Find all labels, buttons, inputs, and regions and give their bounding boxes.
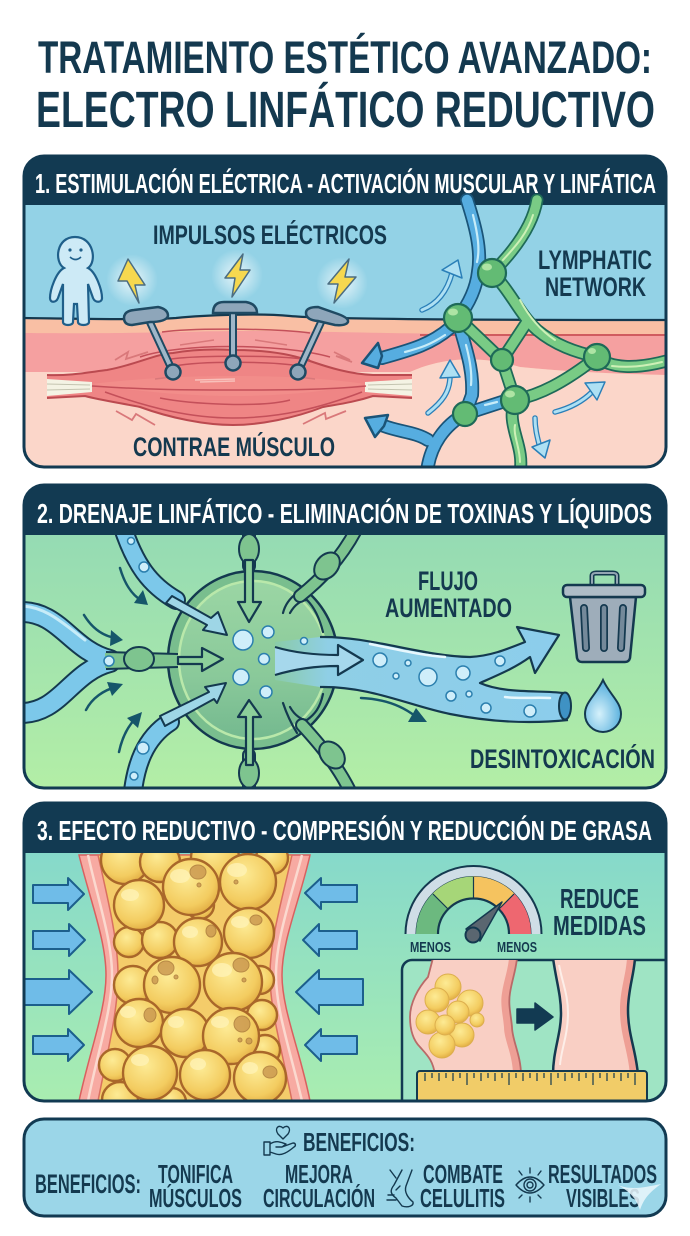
label: contrae músculo: CONTRAE MÚSCULO — [133, 431, 335, 462]
lymph node — [168, 571, 338, 749]
benefit: combate celulitis — [420, 1159, 505, 1213]
gauge: MENOS — [497, 939, 537, 956]
title — [36, 32, 655, 138]
label: flujo aumentado — [385, 566, 512, 623]
incoming vessels — [18, 525, 356, 800]
muscle — [47, 329, 412, 425]
gauge — [410, 872, 537, 956]
benefit: resultados visibles: VISIBLES — [566, 1183, 640, 1213]
label: lymphatic network — [538, 245, 652, 302]
icon: hand with heart — [264, 1126, 295, 1155]
benefit: resultados visibles — [548, 1159, 657, 1213]
compression arrows — [20, 878, 363, 1061]
label: lymphatic network: LYMPHATIC — [538, 245, 652, 275]
benefit: combate celulitis: COMBATE — [423, 1159, 503, 1189]
label: reduce medidas: REDUCE — [560, 883, 639, 914]
inset: before and after with ruler — [400, 958, 664, 1100]
benefit: mejora circulación: MEJORA — [285, 1159, 353, 1189]
benefit: combate celulitis: CELULITIS — [420, 1183, 505, 1213]
benefit: tonifica músculos: MÚSCULOS — [149, 1183, 242, 1213]
tissue column with fat cells — [78, 853, 311, 1100]
label: flujo aumentado: AUMENTADO — [385, 593, 512, 623]
small flow arrows — [422, 260, 605, 458]
label: lymphatic network: NETWORK — [545, 272, 646, 302]
panel: drenaje linfático — [18, 485, 666, 800]
icons: lightning bolts — [106, 249, 368, 309]
lymphatic network — [362, 200, 670, 472]
icon: person — [50, 237, 102, 325]
node particles — [233, 626, 308, 698]
panel: estimulación eléctrica — [24, 156, 670, 472]
watermark sparkle — [618, 1184, 661, 1210]
icon: water drop — [585, 680, 621, 732]
label: flujo aumentado: FLUJO — [418, 566, 478, 596]
icon: trash can — [563, 573, 645, 662]
benefit: tonifica músculos — [149, 1159, 242, 1213]
panel: beneficios — [24, 1119, 666, 1216]
panel: efecto reductivo — [20, 803, 682, 1120]
main drainage vessel and arrow — [275, 627, 571, 722]
label: reduce medidas: MEDIDAS — [553, 910, 646, 941]
benefit: mejora circulación — [263, 1159, 375, 1213]
external flow arrows — [84, 568, 427, 752]
label: reduce medidas — [553, 883, 646, 941]
heading: beneficios: BENEFICIOS: — [303, 1127, 415, 1157]
benefit: mejora circulación: CIRCULACIÓN — [263, 1183, 375, 1213]
benefit: tonifica músculos: TONIFICA — [158, 1159, 233, 1189]
electrodes — [124, 302, 348, 380]
icon: face — [69, 249, 82, 260]
node inner arrows — [160, 560, 363, 765]
label: beneficios row: BENEFICIOS: — [35, 1169, 141, 1199]
icon: eye — [516, 1168, 544, 1202]
label: impulsos eléctricos: IMPULSOS ELÉCTRICOS — [153, 219, 387, 250]
gauge: MENOS — [410, 939, 451, 956]
icon: foot — [387, 1170, 413, 1207]
